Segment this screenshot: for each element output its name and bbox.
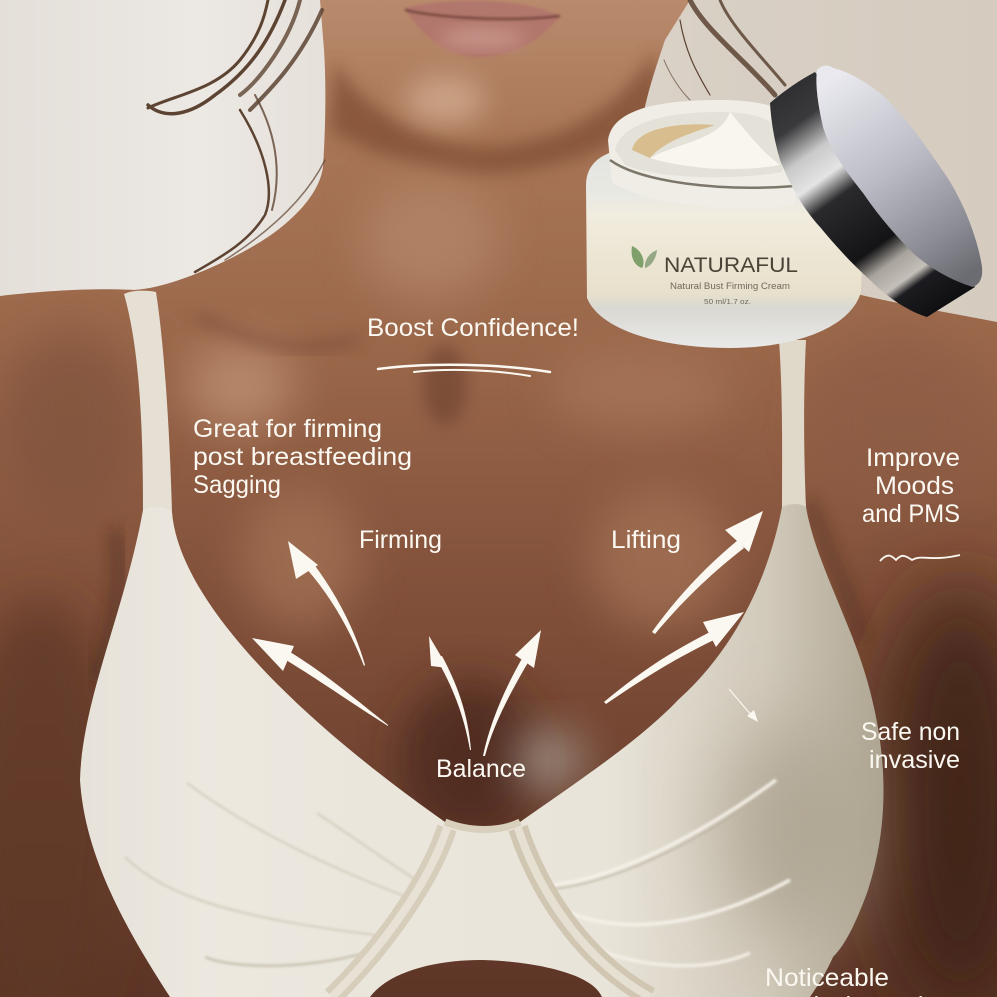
squiggle bbox=[880, 555, 960, 561]
centre underwire bbox=[332, 822, 650, 997]
text: noticeable: Noticeable bbox=[765, 964, 889, 992]
brand leaves bbox=[632, 246, 657, 268]
text: safe non invasive: Safe non bbox=[861, 718, 960, 746]
volume: 50 ml/1.7 oz. bbox=[704, 297, 751, 306]
text: great for firming: post breastfeeding bbox=[193, 443, 412, 471]
arrow: small bbox=[729, 689, 758, 722]
text: improve moods: and PMS bbox=[862, 500, 960, 528]
jar neck and cream bbox=[608, 100, 800, 208]
arrow: balance left bbox=[429, 636, 471, 750]
lips bbox=[405, 1, 560, 57]
brand name: NATURAFUL bbox=[664, 254, 798, 277]
text: great for firming bbox=[193, 415, 412, 499]
label: firming: Firming bbox=[359, 526, 442, 554]
lid rim bbox=[770, 72, 975, 317]
label: balance: Balance bbox=[436, 755, 526, 783]
right strap bbox=[779, 340, 806, 507]
label: lifting: Lifting bbox=[611, 526, 681, 554]
underline scribble bbox=[378, 365, 550, 376]
text: noticeable bbox=[765, 964, 943, 997]
text: improve moods: Improve bbox=[866, 444, 960, 472]
jar body bbox=[586, 152, 862, 348]
text: improve moods: Moods bbox=[875, 472, 954, 500]
garment folds bbox=[125, 780, 790, 966]
product name: Natural Bust Firming Cream bbox=[670, 281, 790, 292]
text: safe non invasive bbox=[861, 718, 960, 774]
text: safe non invasive: invasive bbox=[869, 746, 960, 774]
lid top bbox=[816, 66, 982, 287]
text: great for firming: Sagging bbox=[193, 471, 281, 499]
text: improve moods bbox=[862, 444, 960, 528]
garment bbox=[80, 504, 884, 997]
arrow: firming upper bbox=[288, 541, 365, 666]
heading: boost confidence: Boost Confidence! bbox=[367, 314, 579, 342]
arrow: balance right bbox=[483, 630, 541, 756]
hair strands bbox=[148, 0, 785, 272]
arrow: firming lower bbox=[252, 638, 388, 726]
arrow: lifting upper bbox=[652, 511, 763, 634]
left strap bbox=[124, 291, 172, 512]
product jar bbox=[586, 66, 982, 348]
text: great for firming: Great for firming bbox=[193, 415, 382, 443]
arrow: lifting lower bbox=[604, 612, 744, 704]
